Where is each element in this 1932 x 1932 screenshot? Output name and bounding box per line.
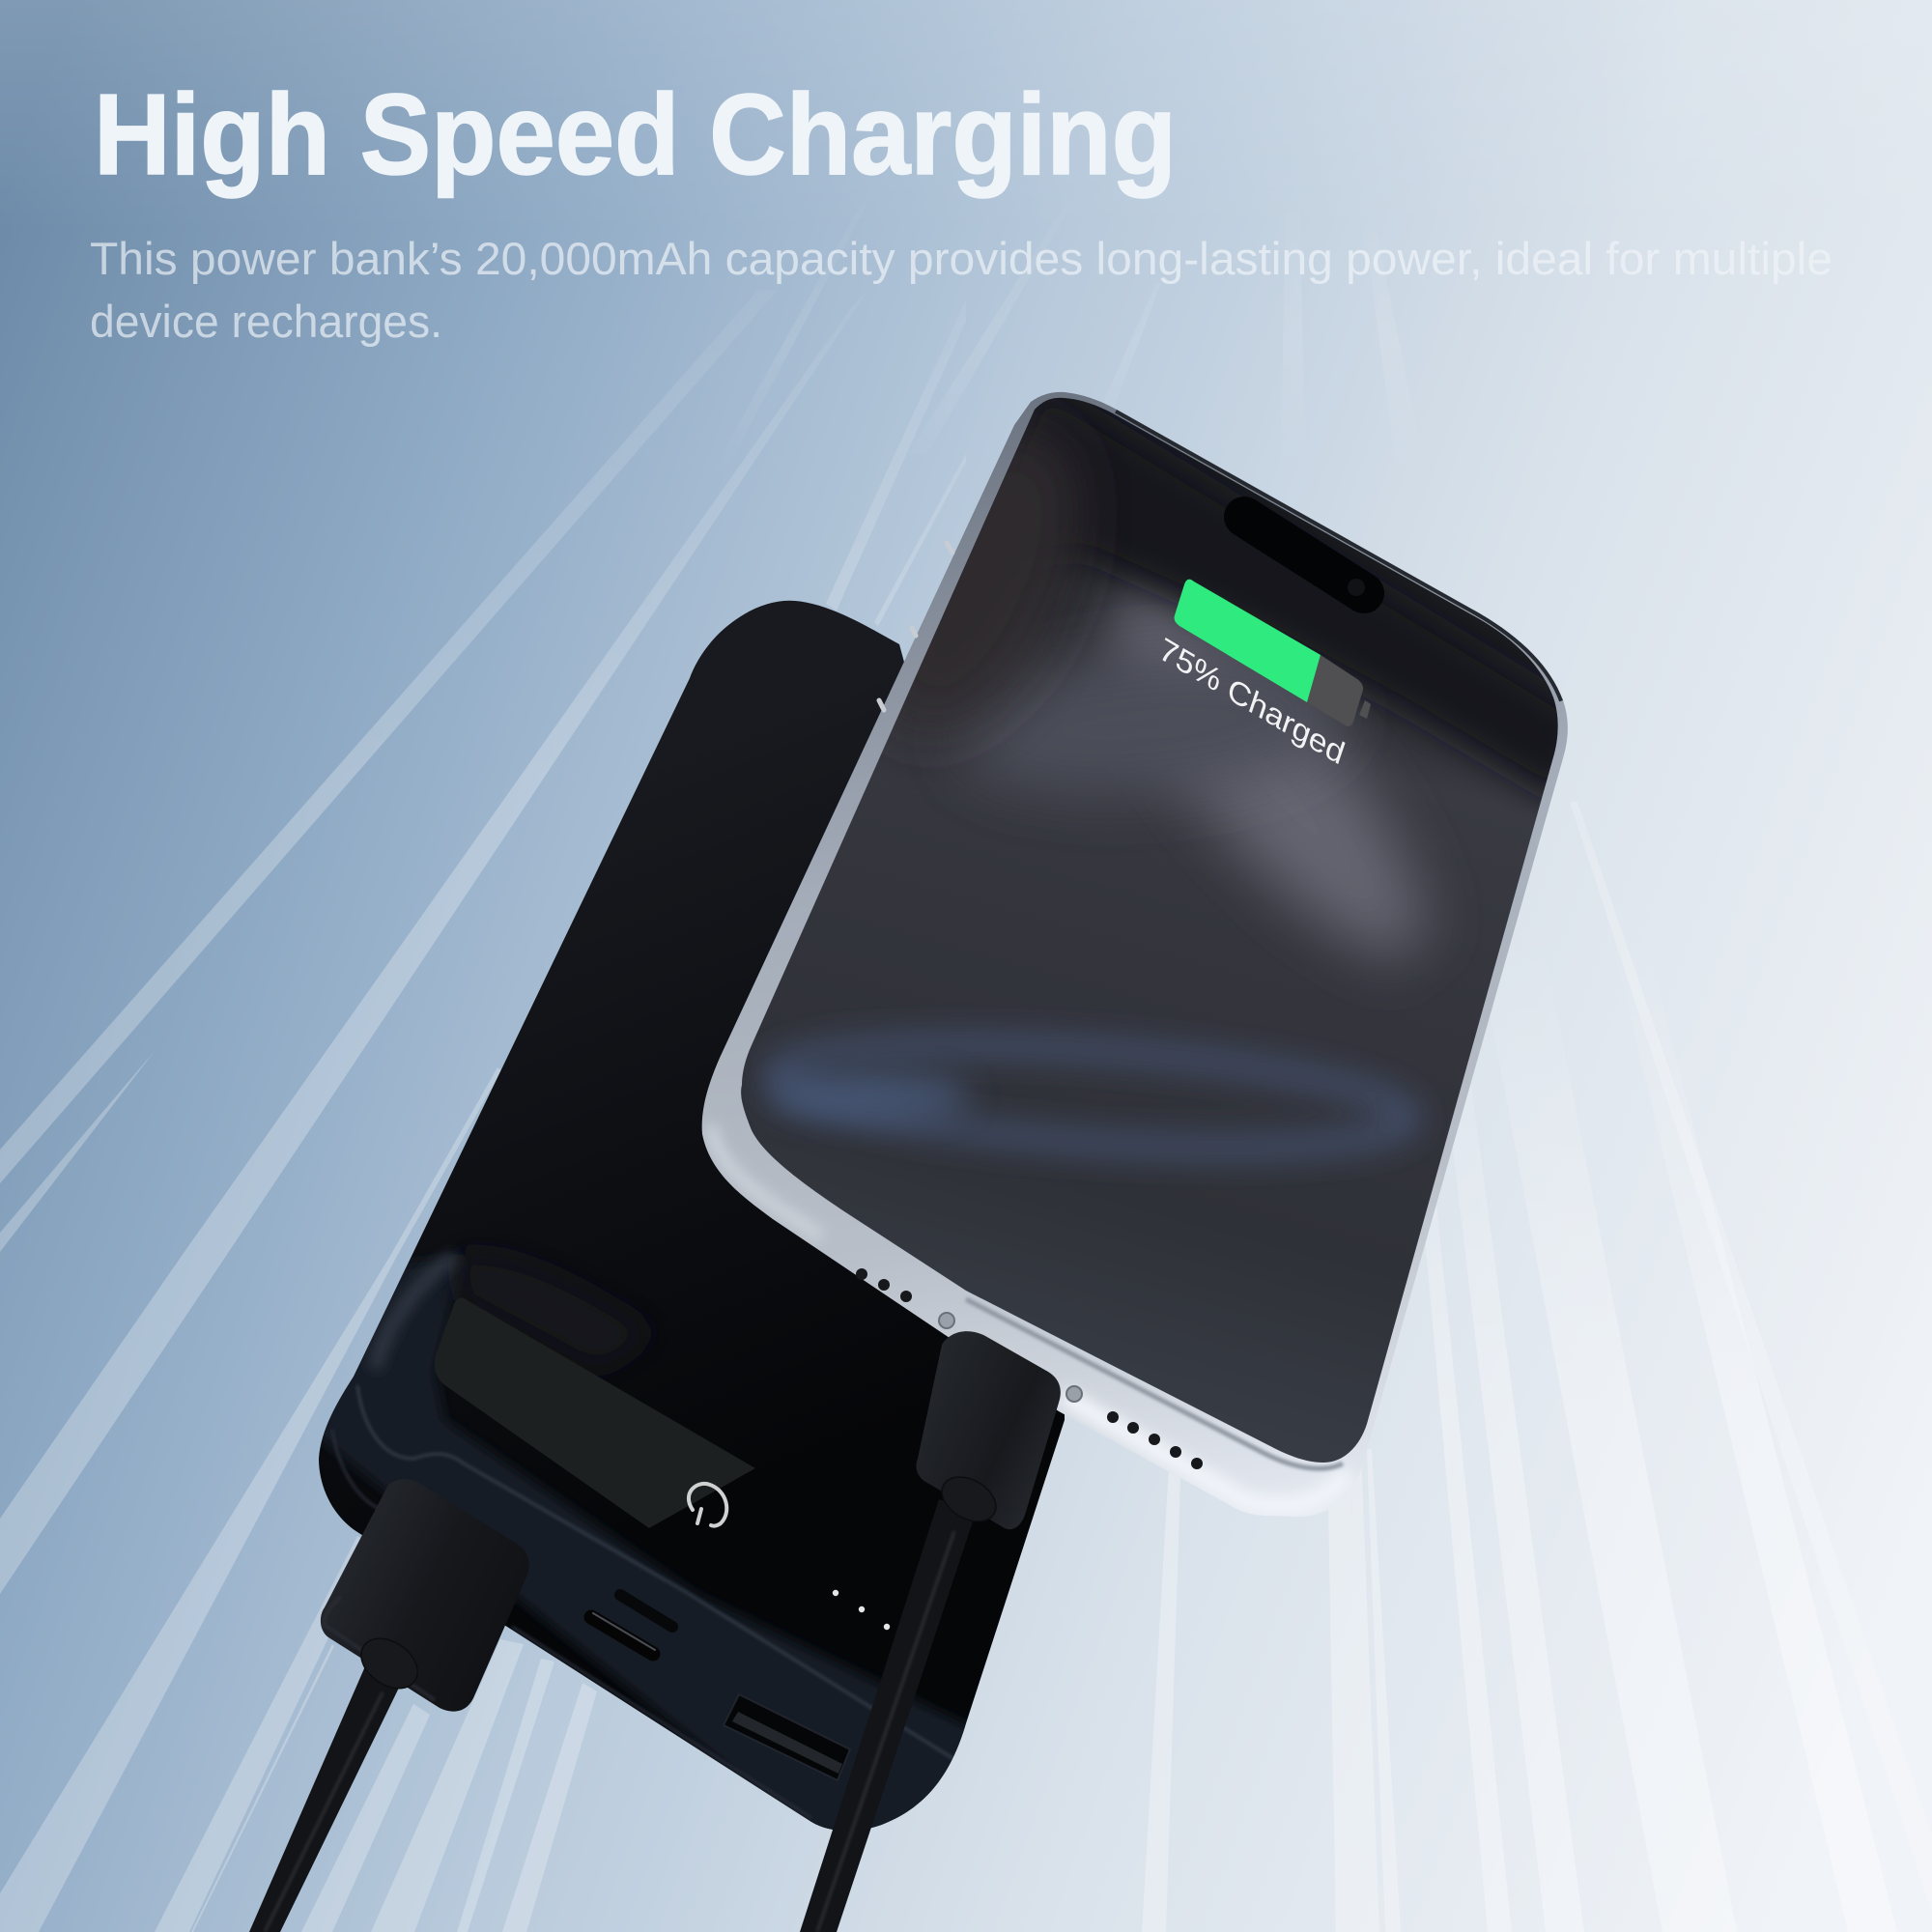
left plug body bbox=[321, 1479, 529, 1712]
right plug body bbox=[916, 1331, 1061, 1529]
display window bbox=[435, 1297, 755, 1528]
camera lens bbox=[1348, 579, 1365, 596]
USB-A port bbox=[724, 1694, 850, 1780]
LED indicators bbox=[833, 1590, 890, 1630]
description line 1: This power bank’s 20,000mAh capacity provides long-lasting power, ideal for multiple bbox=[90, 233, 1833, 284]
battery indicator bbox=[1175, 580, 1371, 726]
right cable and plug bbox=[800, 1331, 1061, 1932]
screws bbox=[939, 1313, 1082, 1402]
description text bbox=[90, 233, 1833, 347]
upper-left tint bbox=[889, 423, 1089, 740]
right plug collar bbox=[934, 1468, 1004, 1530]
screen light reflection bbox=[1086, 574, 1445, 977]
side buttons bbox=[879, 543, 952, 710]
speaker holes right bbox=[1107, 1411, 1203, 1469]
left cable and plug bbox=[249, 1479, 529, 1932]
description line 2: device recharges. bbox=[90, 296, 442, 347]
frame highlights bbox=[710, 410, 1563, 1507]
body shading bbox=[309, 1254, 1014, 1835]
left cable bbox=[249, 1666, 400, 1932]
right cable bbox=[800, 1499, 976, 1932]
blue swoosh reflection bbox=[770, 1028, 1413, 1165]
lower-right rays bbox=[1385, 773, 1897, 1932]
speaker holes left bbox=[856, 1268, 912, 1302]
black indicator panel bbox=[649, 1468, 975, 1707]
phone frame bbox=[702, 392, 1568, 1517]
battery remaining bbox=[1307, 655, 1363, 726]
dynamic island bbox=[1244, 517, 1364, 593]
battery green charge bbox=[1175, 580, 1321, 702]
title: High Speed Charging bbox=[94, 71, 1177, 199]
power bank body bbox=[319, 601, 1065, 1831]
rays below the phone bbox=[1142, 1449, 1401, 1932]
faint top rays bbox=[700, 190, 1432, 502]
left rays fading upward bbox=[0, 290, 966, 1594]
battery label: 75% Charged bbox=[1155, 630, 1349, 772]
lower-left rays bbox=[0, 1051, 597, 1932]
USB-C ports bbox=[591, 1595, 672, 1654]
icon: power button bbox=[689, 1484, 726, 1526]
battery nub bbox=[1359, 700, 1371, 719]
power bank bbox=[309, 601, 1065, 1835]
thin ray right of phone bbox=[1570, 802, 1932, 1913]
phone bbox=[696, 367, 1584, 1517]
left plug collar bbox=[352, 1629, 427, 1698]
dark upper area bbox=[966, 386, 1584, 802]
phone screen bbox=[741, 398, 1558, 1463]
